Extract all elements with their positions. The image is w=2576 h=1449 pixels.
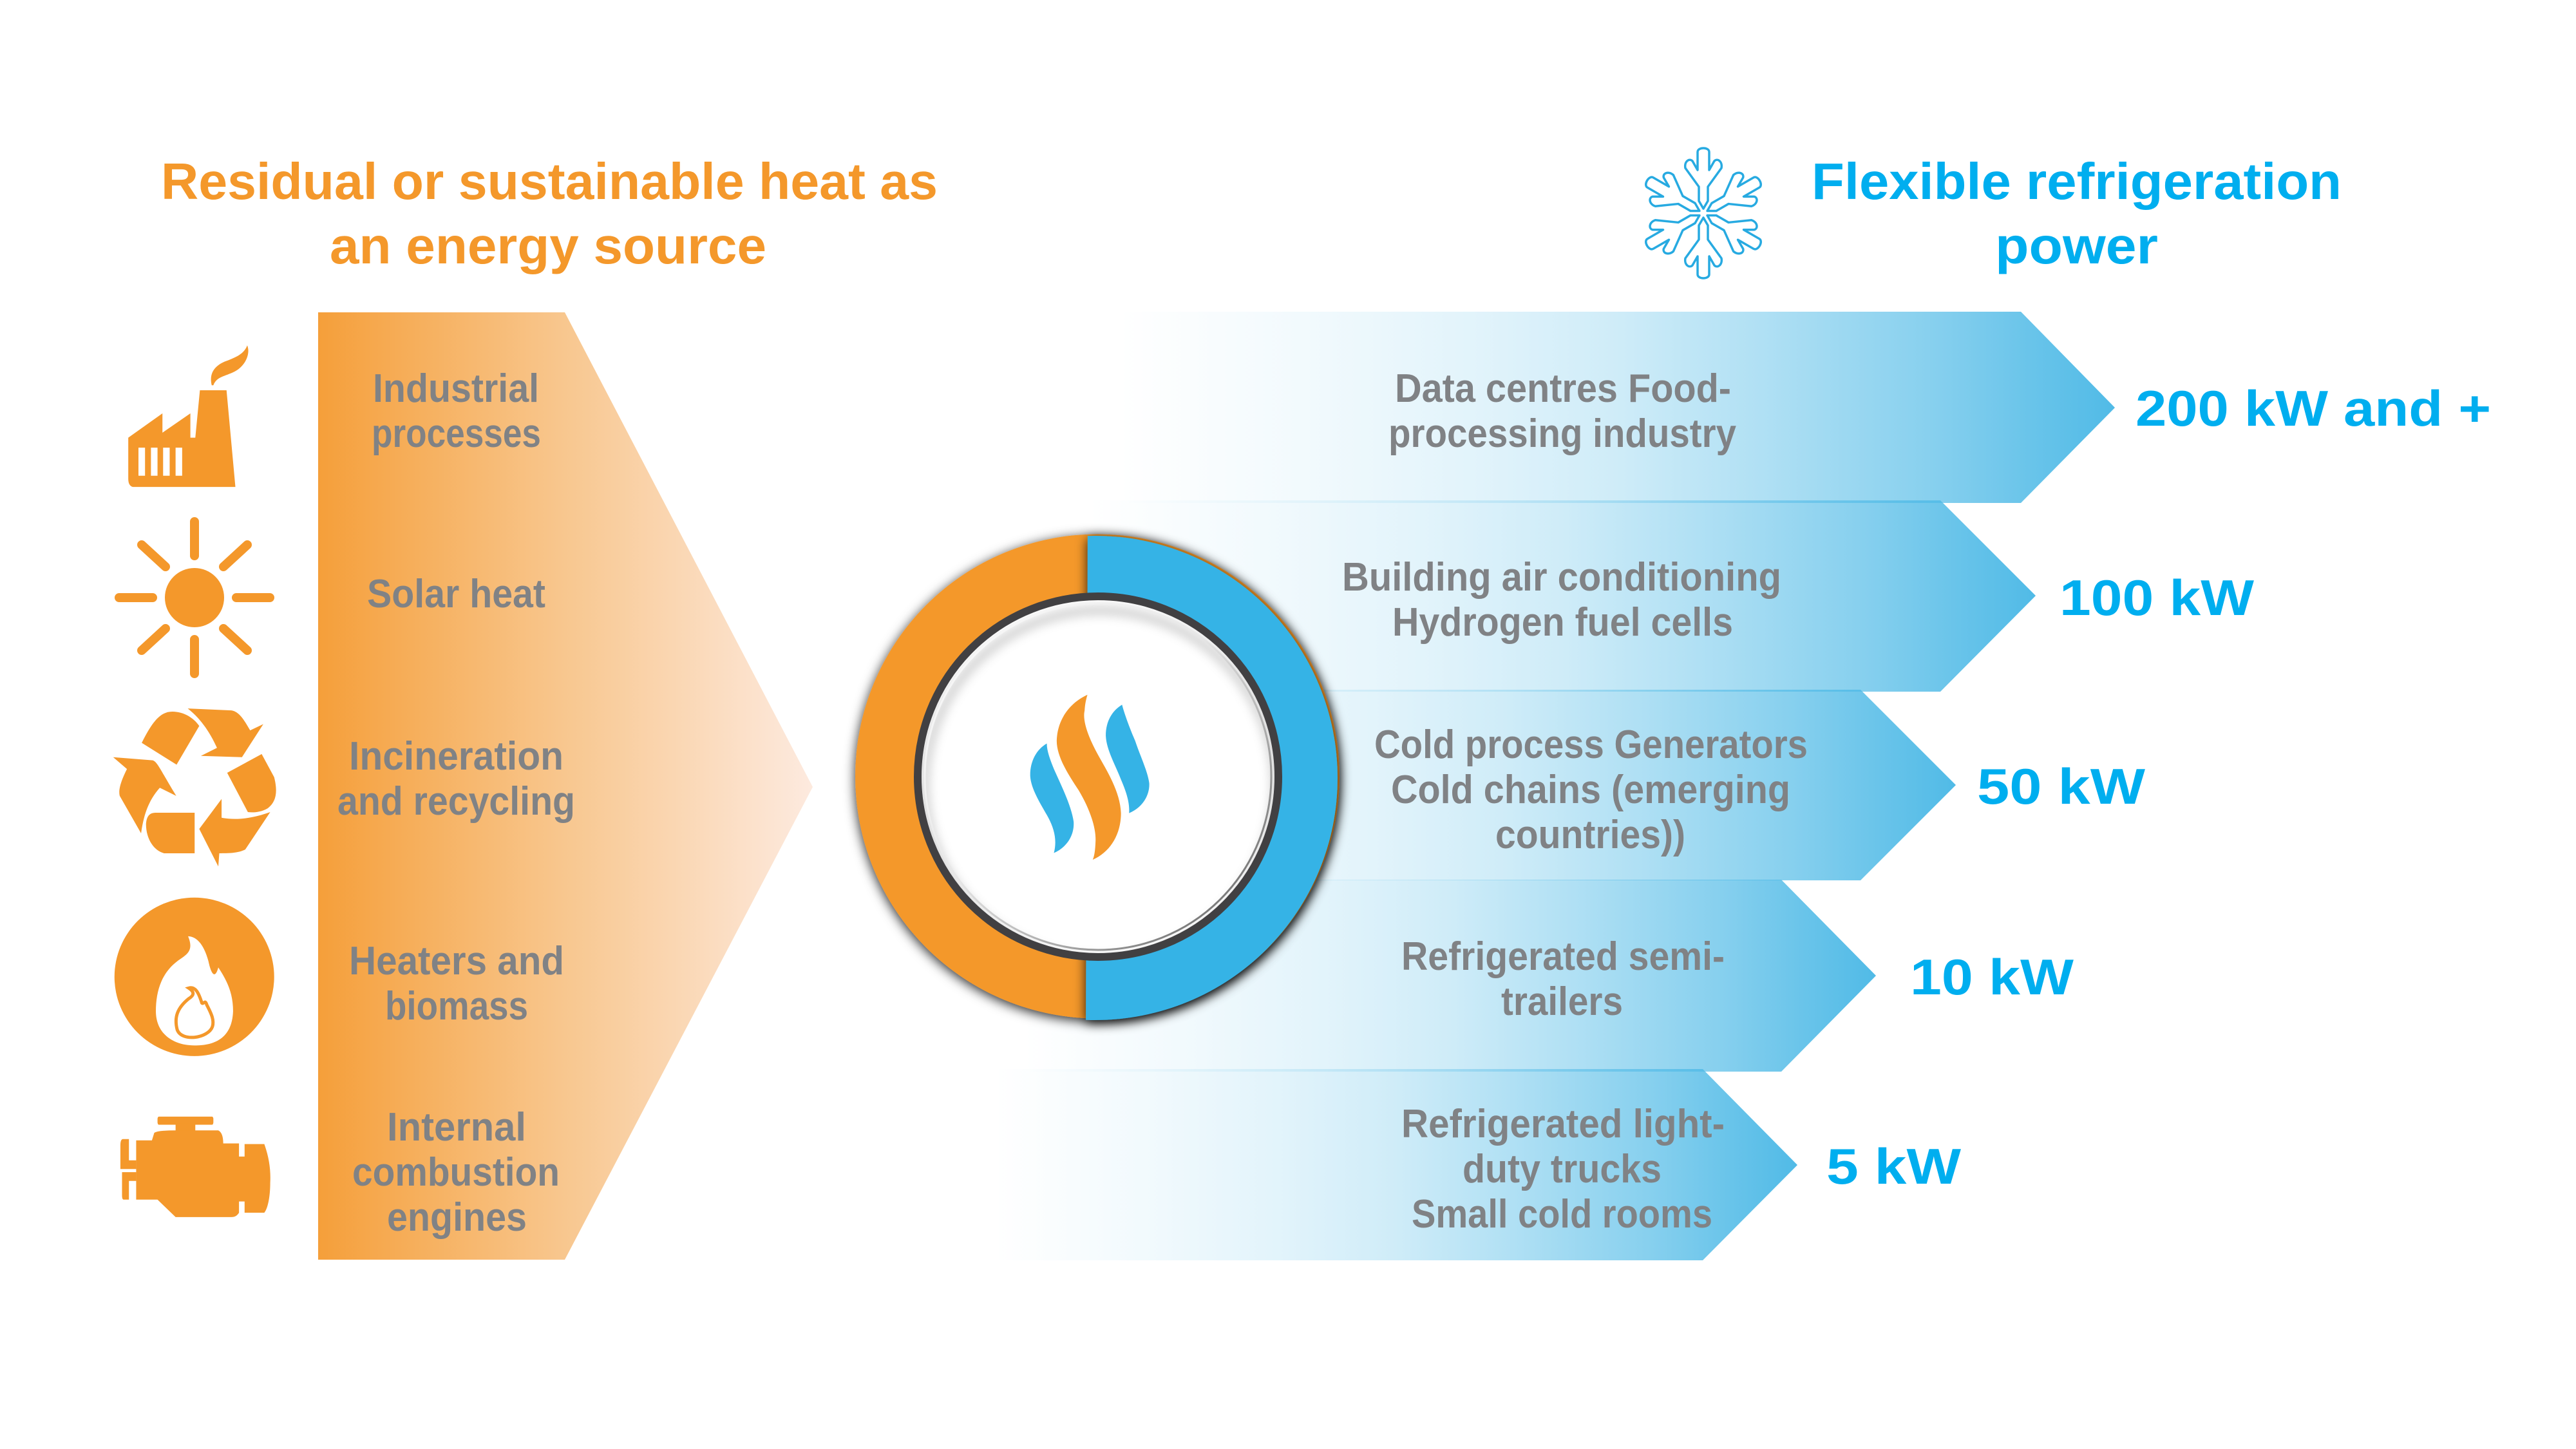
arrow: 200 kW	[1119, 312, 2115, 503]
label: data centres	[1388, 366, 1736, 456]
label: light-duty trucks: duty trucks	[1463, 1147, 1662, 1191]
label: semi-trailers: Refrigerated semi-	[1401, 934, 1725, 979]
label: Internal combustion engines: combustion	[352, 1150, 560, 1195]
icon: engine	[120, 1117, 270, 1217]
label: cold process: Cold process Generators	[1374, 723, 1808, 767]
label: cold process: Cold chains (emerging	[1391, 768, 1790, 812]
label: Industrial processes	[372, 366, 541, 456]
arrow: 10 kW	[1024, 880, 1876, 1072]
arrow: 5 kW	[995, 1069, 1797, 1260]
label: semi-trailers: trailers	[1501, 980, 1623, 1024]
label: Heaters and biomass: biomass	[385, 984, 528, 1028]
infographic	[113, 147, 2489, 1260]
label: light-duty trucks: Refrigerated light-	[1401, 1102, 1725, 1146]
heading: heat source	[161, 153, 938, 274]
icon: sun	[119, 522, 270, 674]
value: 100 kW: 100 kW	[2060, 569, 2254, 626]
value: 10 kW: 10 kW	[1910, 949, 2074, 1005]
centre ring	[853, 535, 1340, 1020]
icon: flame in circle	[115, 898, 274, 1056]
label: Internal combustion engines: engines	[387, 1195, 527, 1240]
value: 200 kW and +: 200 kW and +	[2136, 380, 2491, 437]
arrow: 50 kW	[1056, 690, 1956, 880]
ring: orange half	[855, 535, 1340, 1019]
heading: refrigeration power: power	[1995, 217, 2158, 274]
heading: refrigeration power: Flexible refrigeration	[1812, 153, 2342, 210]
panel: heat sources arrow	[318, 312, 813, 1260]
value: 50 kW: 50 kW	[1977, 758, 2145, 815]
label: Heaters and biomass	[349, 939, 564, 1028]
logo: flame	[1030, 695, 1150, 860]
label: Industrial processes: Industrial	[373, 366, 539, 411]
label: Solar heat: Solar heat	[367, 572, 545, 616]
label: Internal combustion engines	[352, 1105, 560, 1240]
arrow: orange gradient	[318, 312, 813, 1260]
icon: factory	[128, 345, 249, 487]
label: building air conditioning	[1342, 555, 1781, 645]
label: light-duty trucks: Small cold rooms	[1412, 1192, 1712, 1236]
label: Incineration and recycling: and recycling	[337, 779, 575, 824]
label: semi-trailers	[1401, 934, 1725, 1024]
ring: blue half	[1076, 529, 1347, 1032]
label: Incineration and recycling: Incineration	[349, 734, 564, 779]
label: data centres: Data centres Food-	[1395, 366, 1731, 411]
inner disc	[918, 596, 1278, 961]
icon: snowflake	[1638, 148, 1769, 278]
label: Heaters and biomass: Heaters and	[349, 939, 564, 983]
panel: refrigeration power arrows	[995, 312, 2115, 1260]
icon: recycling	[113, 708, 276, 866]
label: light-duty trucks	[1401, 1102, 1725, 1236]
label: building air conditioning: Building air conditioning	[1342, 555, 1781, 600]
label: cold process: countries))	[1495, 813, 1685, 857]
label: Internal combustion engines: Internal	[387, 1105, 526, 1150]
heading: refrigeration power	[1812, 153, 2342, 274]
label: Incineration and recycling	[337, 734, 575, 824]
heading: heat source: an energy source	[330, 217, 766, 274]
arrow: 100 kW	[1088, 500, 2036, 692]
value: 5 kW: 5 kW	[1826, 1138, 1961, 1195]
heading: heat source: Residual or sustainable heat as	[161, 153, 938, 210]
label: cold process	[1374, 723, 1808, 857]
label: building air conditioning: Hydrogen fuel cells	[1392, 600, 1733, 645]
label: data centres: processing industry	[1388, 412, 1736, 456]
label: Industrial processes: processes	[372, 412, 541, 456]
